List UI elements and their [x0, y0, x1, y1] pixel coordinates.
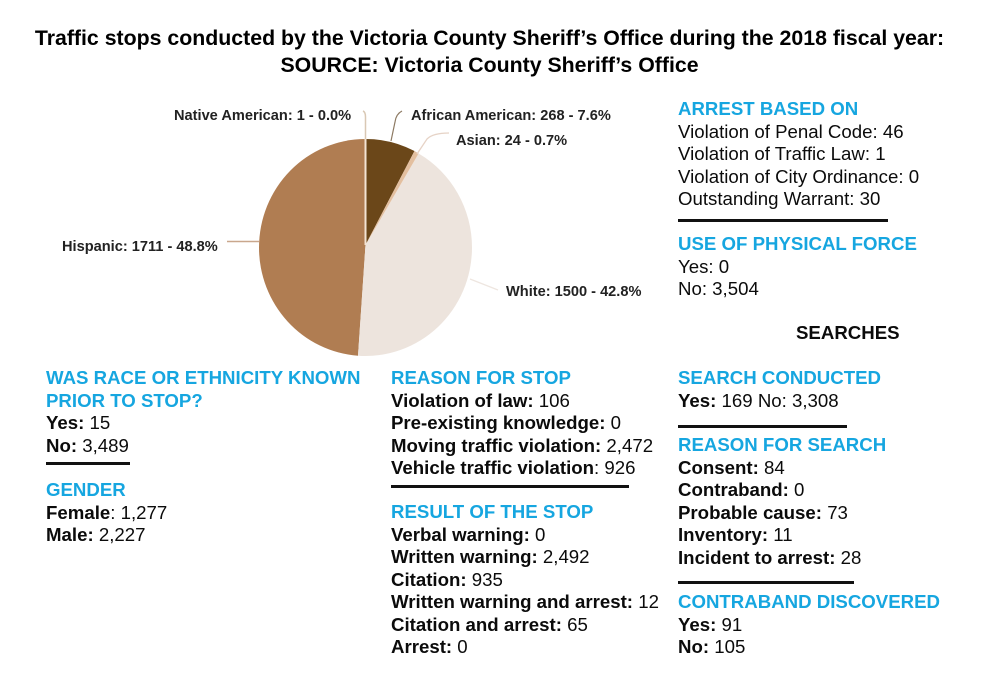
pie chart: race and ethnicity	[62, 108, 642, 356]
slice: Asian	[366, 151, 419, 245]
list: search reasons: Consent: 84	[678, 456, 785, 478]
list: search reasons	[678, 456, 861, 568]
slice: White	[358, 154, 472, 356]
panel: contraband discovered	[678, 591, 940, 657]
panel: reason for stop	[391, 367, 653, 478]
title	[35, 26, 944, 77]
panel: use of physical force	[678, 233, 917, 299]
list: stop results	[391, 524, 659, 657]
label: Hispanic: Hispanic: 1711 - 48.8%	[62, 239, 218, 255]
slice: Hispanic	[259, 139, 366, 356]
leader: African American	[391, 111, 402, 141]
list: stop results: Arrest: 0	[391, 636, 468, 657]
list: stop reasons: Violation of law: 106	[391, 390, 570, 410]
list: stop results: Written warning: 2,492	[391, 546, 590, 567]
list: stop reasons	[391, 390, 653, 478]
list: search reasons: Probable cause: 73	[678, 502, 848, 522]
heading: reason for stop: REASON FOR STOP	[391, 367, 571, 388]
heading: contraband discovered: CONTRABAND DISCOVERED	[678, 591, 940, 612]
heading: use of physical force: USE OF PHYSICAL FORCE	[678, 233, 917, 254]
heading: race known: WAS RACE OR ETHNICITY KNOWN	[46, 367, 360, 388]
list: search reasons: Inventory: 11	[678, 524, 793, 545]
list: arrest reasons	[678, 120, 919, 209]
heading: race known	[46, 367, 360, 410]
text: search counts: Yes: 169 No: 3,308	[678, 390, 839, 410]
title: SOURCE: Victoria County Sheriff’s Office	[280, 53, 699, 77]
list: race known counts	[46, 412, 129, 456]
list: gender counts: Male: 2,227	[46, 524, 145, 545]
leader: White	[470, 279, 498, 290]
list: force counts	[678, 256, 759, 299]
list: gender counts: Female: 1,277	[46, 502, 167, 522]
heading: gender: GENDER	[46, 479, 126, 500]
heading: result of the stop: RESULT OF THE STOP	[391, 501, 593, 522]
heading: reason for search: REASON FOR SEARCH	[678, 434, 886, 455]
label: Native American: Native American: 1 - 0.0%	[174, 108, 351, 124]
list: race known counts: Yes: 15	[46, 412, 110, 433]
label: African American: African American: 268 - 7.6%	[411, 108, 611, 124]
list: race known counts: No: 3,489	[46, 434, 129, 456]
heading: search conducted: SEARCH CONDUCTED	[678, 367, 881, 388]
list: stop results: Verbal warning: 0	[391, 524, 545, 544]
heading: searches: SEARCHES	[796, 322, 900, 343]
list: search reasons: Contraband: 0	[678, 479, 804, 500]
list: stop reasons: Pre-existing knowledge: 0	[391, 412, 621, 433]
list: contraband counts	[678, 614, 745, 657]
list: arrest reasons: Violation of City Ordinance: 0	[678, 166, 919, 186]
list: stop results: Citation and arrest: 65	[391, 614, 588, 634]
panel: reason for search	[678, 434, 886, 568]
list: force counts: Yes: 0	[678, 256, 729, 276]
panel: arrest based on	[678, 98, 919, 209]
label: Asian: Asian: 24 - 0.7%	[456, 133, 567, 149]
list: contraband counts: Yes: 91	[678, 614, 742, 634]
slice: Native American	[364, 139, 366, 245]
list: stop reasons: Vehicle traffic violation: 926	[391, 457, 636, 478]
heading: race known: PRIOR TO STOP?	[46, 390, 203, 410]
list: contraband counts: No: 105	[678, 636, 745, 657]
slice: African American	[366, 139, 414, 245]
panel: gender	[46, 479, 167, 545]
heading: arrest based on: ARREST BASED ON	[678, 98, 858, 119]
list: stop reasons: Moving traffic violation: 2,472	[391, 434, 653, 456]
leader: Native American	[363, 111, 366, 139]
list: gender counts	[46, 502, 167, 545]
panel: was race or ethnicity known	[46, 367, 360, 456]
panel: search conducted	[678, 367, 881, 410]
list: arrest reasons: Violation of Penal Code: 46	[678, 120, 904, 142]
label: White: White: 1500 - 42.8%	[506, 284, 641, 300]
list: stop results: Citation: 935	[391, 568, 503, 590]
leader: Hispanic	[227, 240, 259, 242]
list: arrest reasons: Violation of Traffic Law: 1	[678, 143, 886, 164]
list: search reasons: Incident to arrest: 28	[678, 546, 861, 568]
list: force counts: No: 3,504	[678, 278, 759, 299]
panel: result of the stop	[391, 501, 659, 657]
title: Traffic stops conducted by the Victoria County Sheriff’s Office during the 2018 fiscal year:	[35, 26, 944, 50]
list: stop results: Written warning and arrest: 12	[391, 591, 659, 612]
list: arrest reasons: Outstanding Warrant: 30	[678, 188, 880, 209]
leader: Asian	[417, 133, 449, 154]
